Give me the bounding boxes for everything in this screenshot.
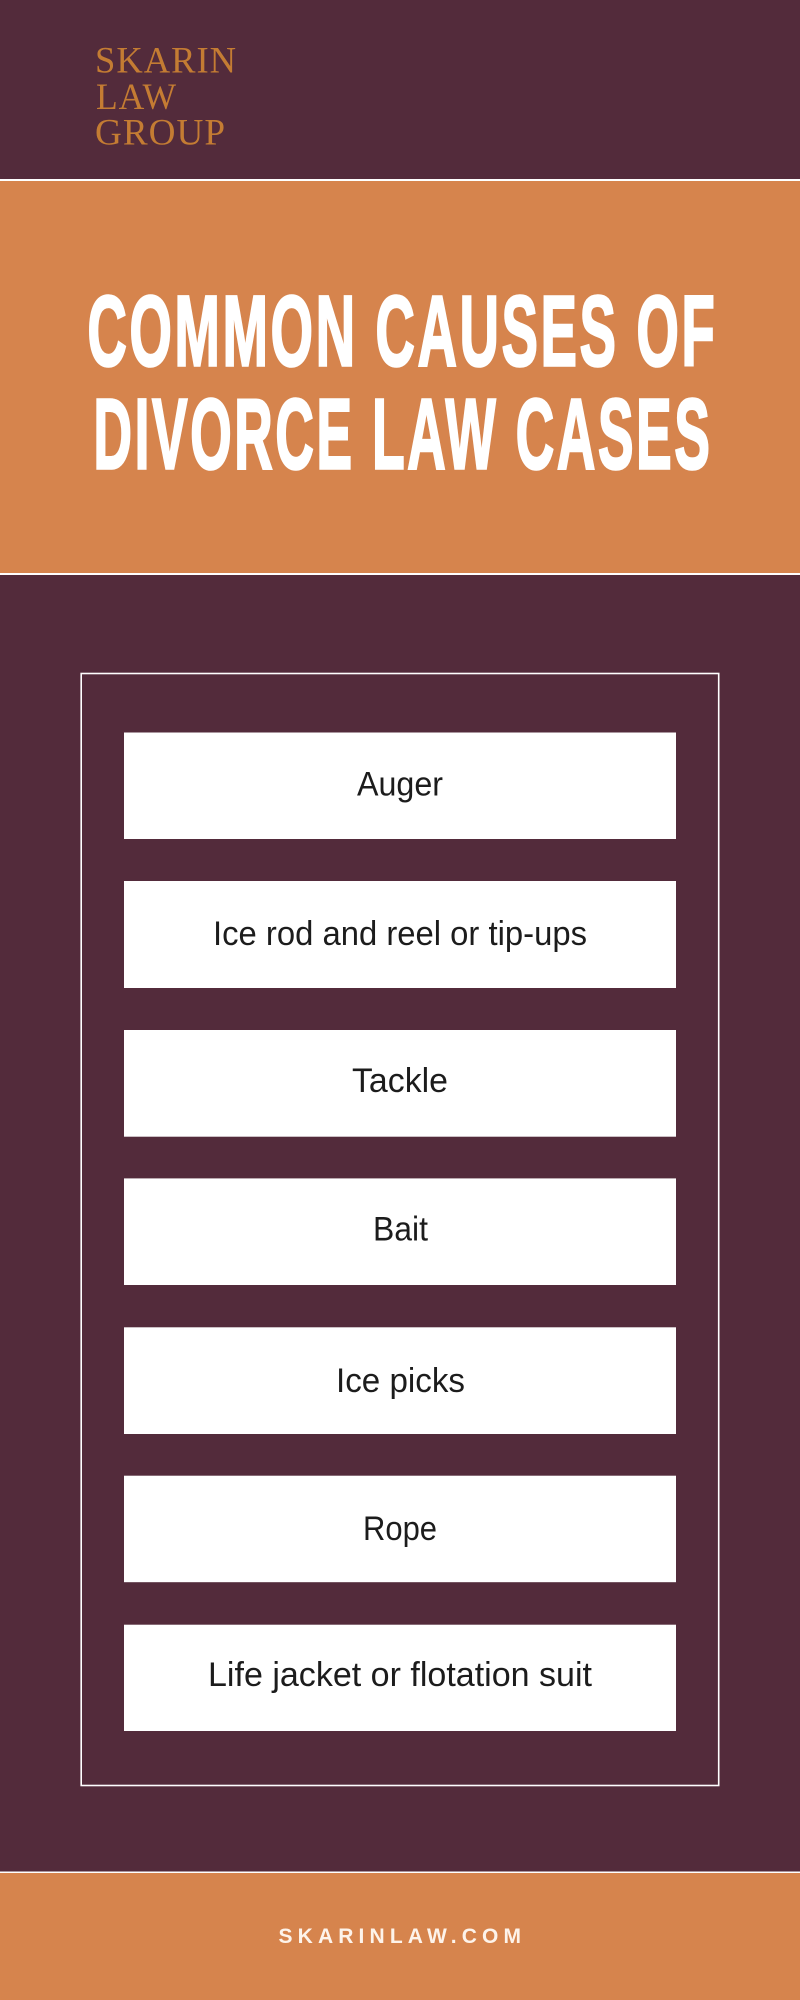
list item: Rope bbox=[124, 1476, 676, 1582]
list item: Ice rod and reel or tip-ups bbox=[124, 881, 676, 988]
list item: Ice picks bbox=[124, 1327, 676, 1434]
logo: Skarin Law Group: LAW bbox=[96, 77, 177, 118]
list item: Bait: Bait bbox=[373, 1211, 428, 1249]
list item: Tackle: Tackle bbox=[352, 1062, 448, 1100]
list item: Tackle bbox=[124, 1030, 676, 1137]
list item: Rope: Rope bbox=[363, 1510, 437, 1548]
panel: footer bbox=[0, 1872, 800, 2000]
list item: Auger: Auger bbox=[357, 766, 443, 804]
list item: Ice picks: Ice picks bbox=[336, 1362, 465, 1400]
list item: Life jacket or flotation suit: Life jacket or flotation suit bbox=[208, 1656, 592, 1694]
list item: Auger bbox=[124, 732, 676, 839]
logo: Skarin Law Group: GROUP bbox=[95, 113, 226, 154]
list item: Bait bbox=[124, 1178, 676, 1285]
footer url: SKARINLAW.COM bbox=[278, 1925, 521, 1948]
logo: Skarin Law Group: SKARIN bbox=[95, 41, 237, 82]
logo: Skarin Law Group bbox=[95, 41, 237, 154]
list item: Ice rod and reel or tip-ups: Ice rod and reel or tip-ups bbox=[213, 915, 587, 953]
list item: Life jacket or flotation suit bbox=[124, 1625, 676, 1731]
panel: list frame bbox=[81, 674, 719, 1786]
title bbox=[88, 276, 718, 490]
panel: title banner bbox=[0, 179, 800, 575]
